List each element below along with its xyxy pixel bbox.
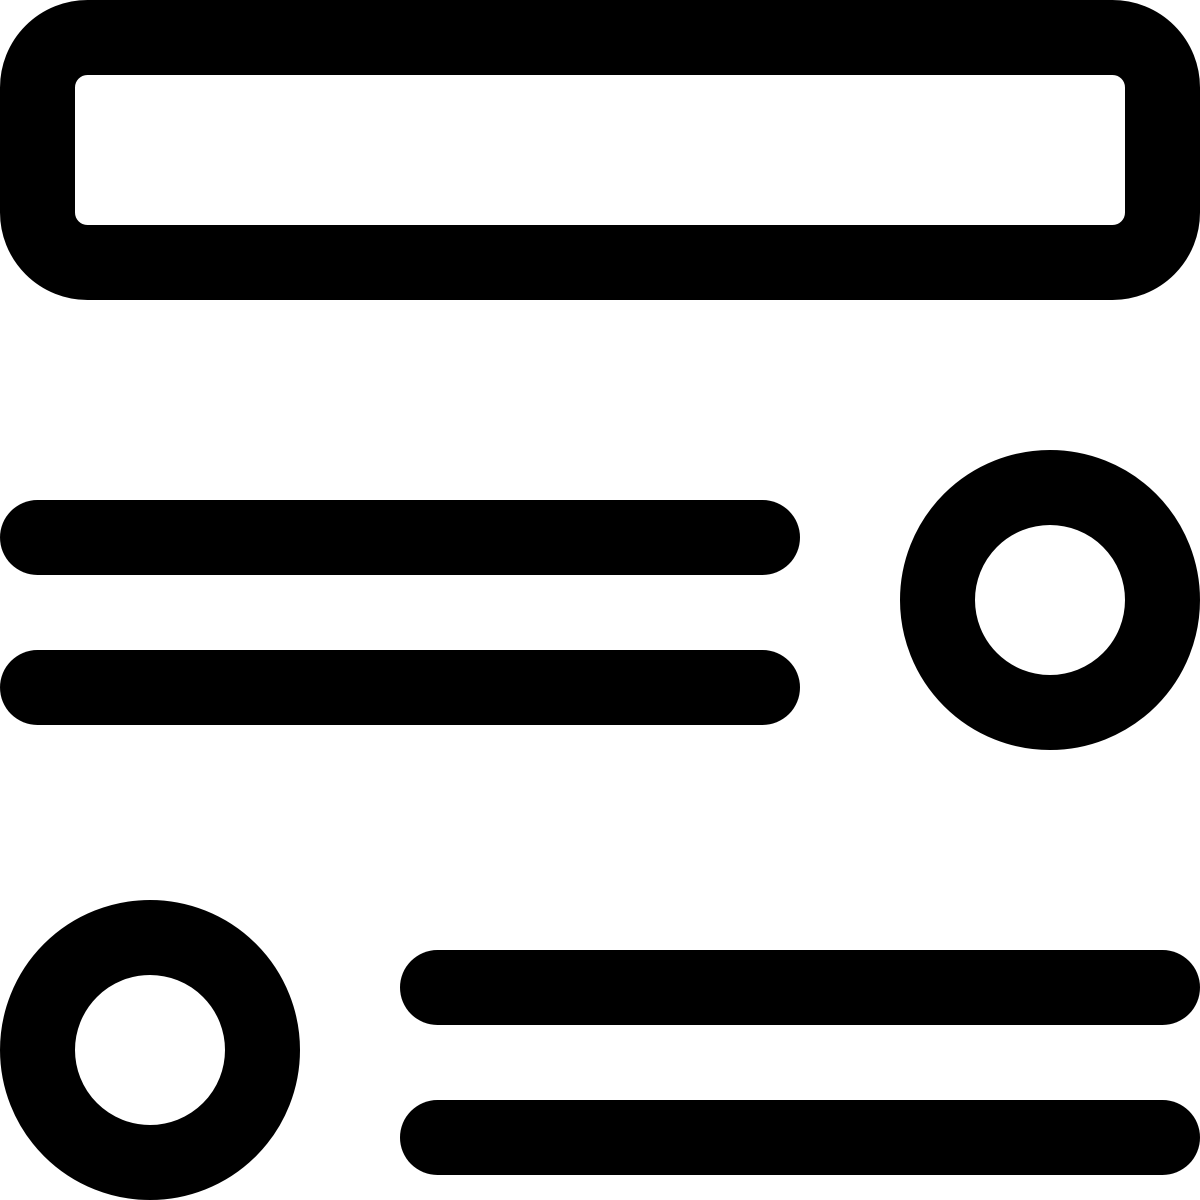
header bar: [38, 38, 1162, 262]
row 1 circle: [938, 488, 1162, 712]
row 1 text lines: [38, 538, 762, 688]
row 2 circle: [38, 938, 262, 1162]
row 2 text lines: [438, 988, 1162, 1138]
